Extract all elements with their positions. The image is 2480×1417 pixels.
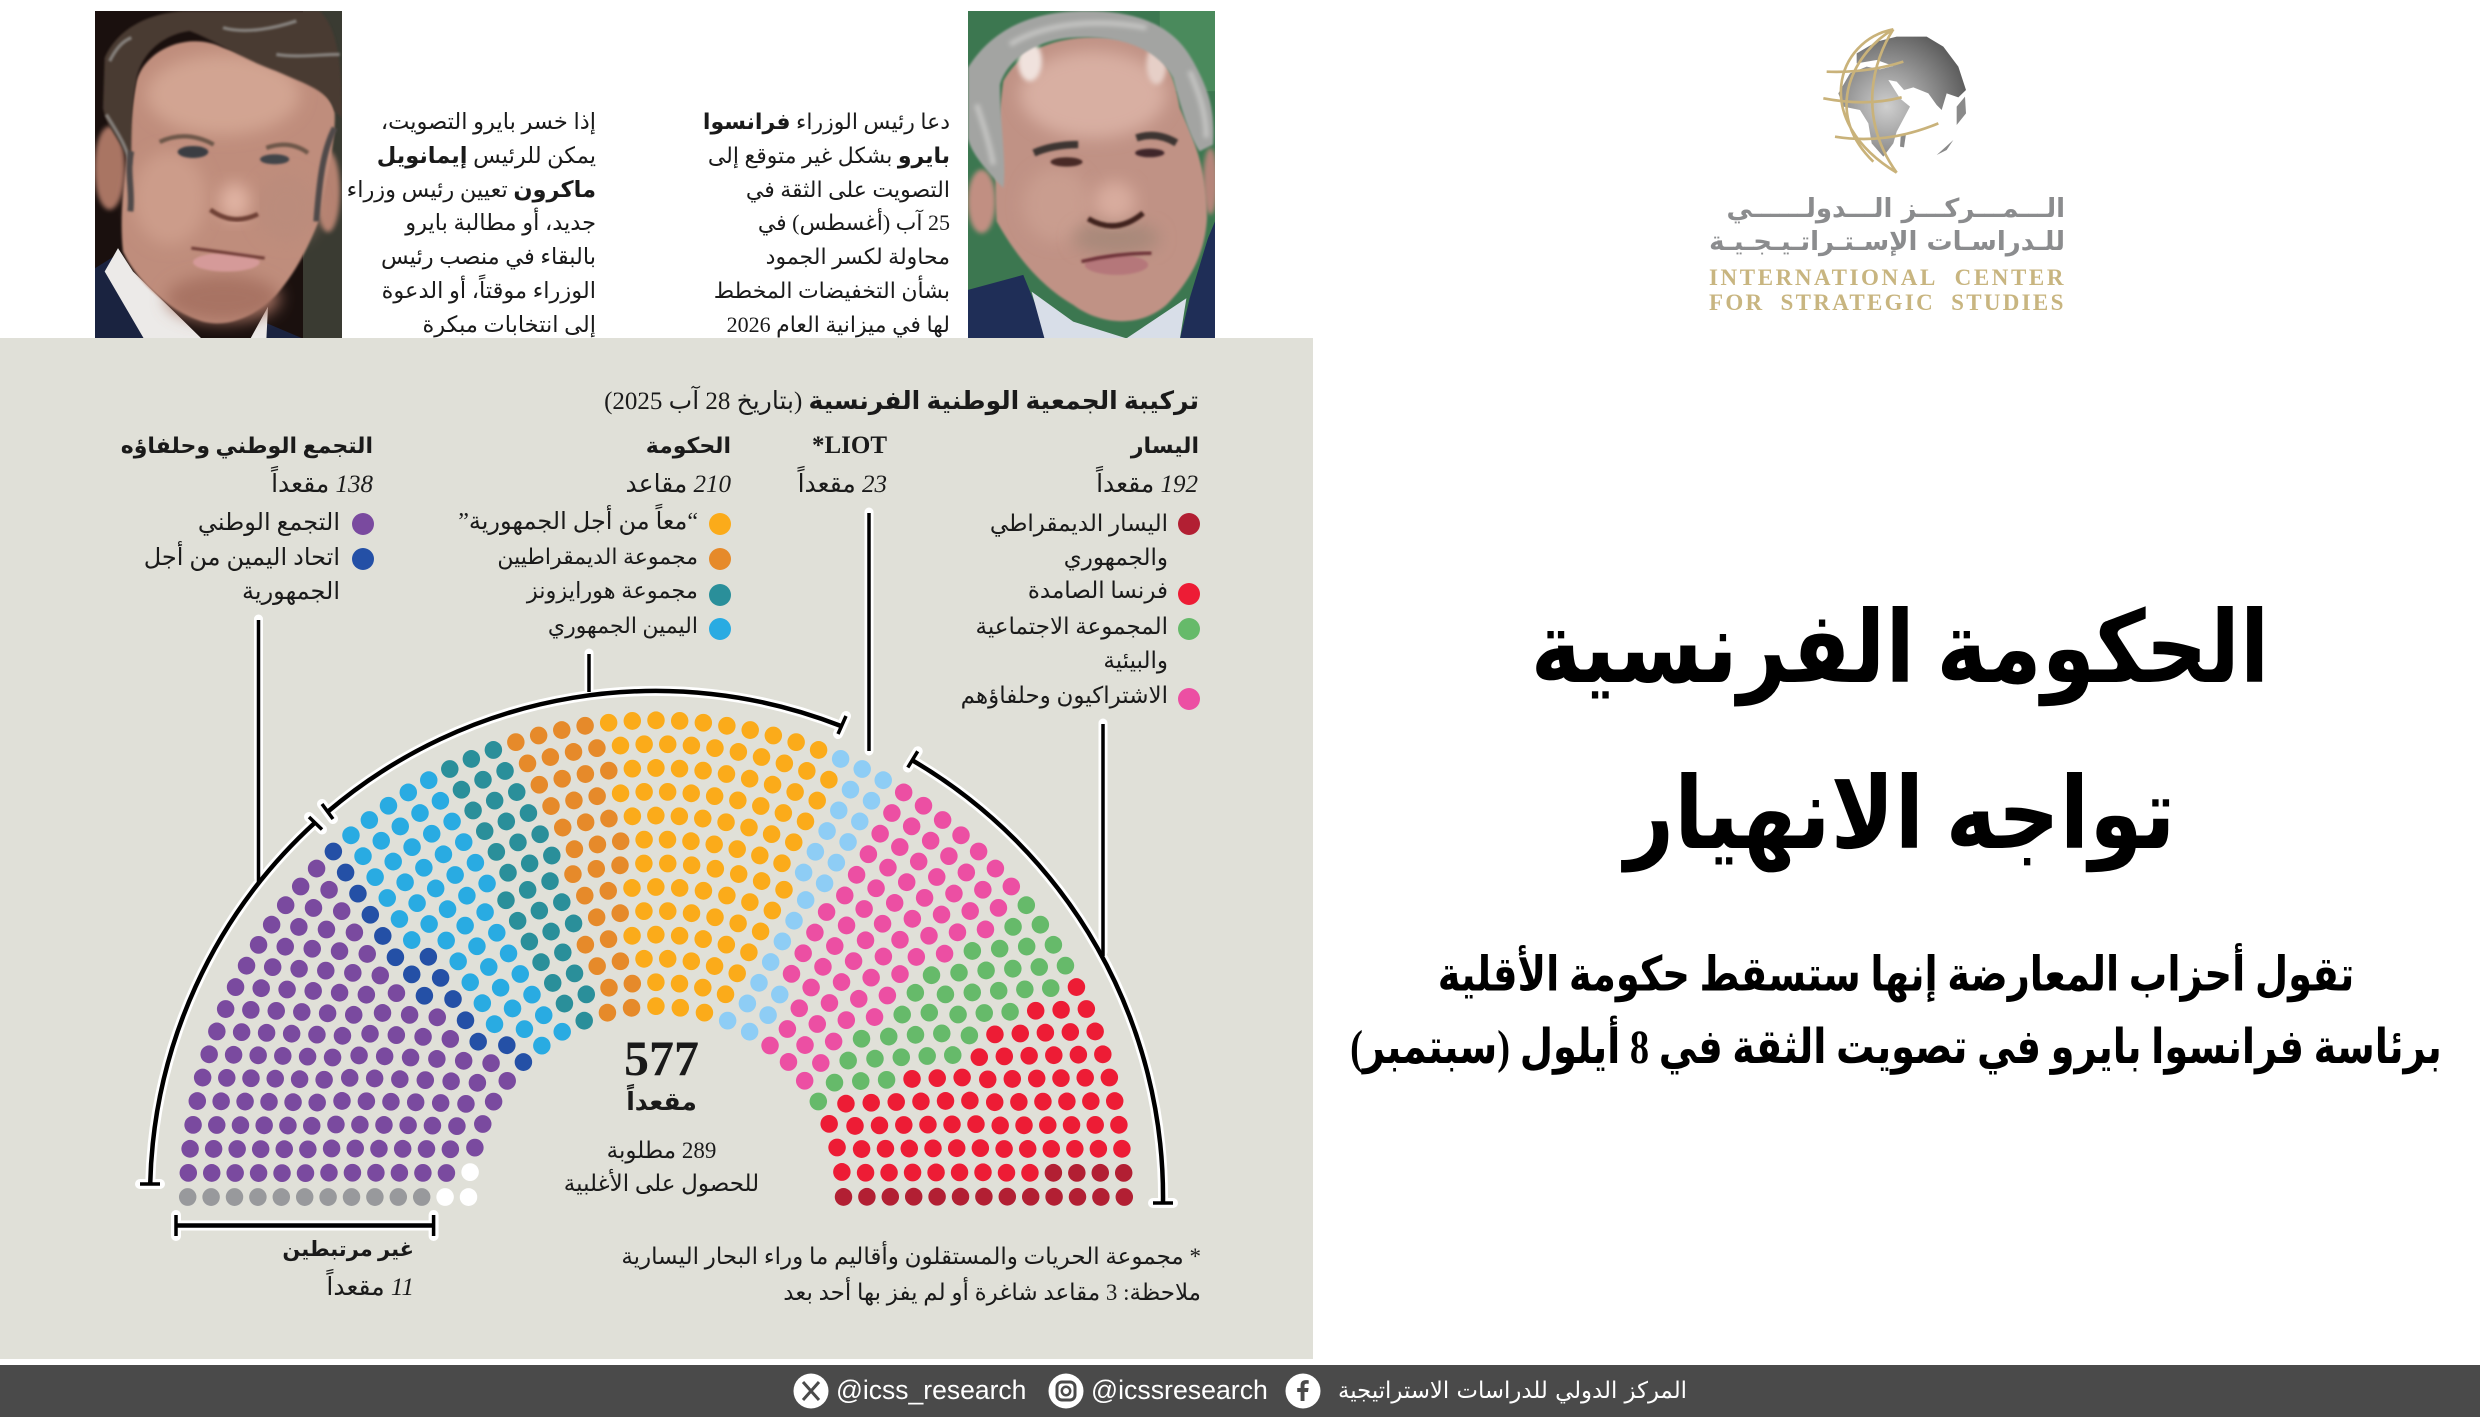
seat count: 192 مقعداً xyxy=(1096,471,1198,498)
text block: Bayrou: دعا رئيس الوزراء فرانسوا xyxy=(703,109,950,134)
legend label: مجموعة هورايزونز xyxy=(527,578,698,603)
seat count: 138 مقعداً xyxy=(271,471,373,498)
legend label xyxy=(976,614,1168,674)
legend label xyxy=(144,541,340,605)
column: LIOT xyxy=(797,432,887,498)
legend dot: Democratic and Republican Left xyxy=(1178,513,1200,535)
legend dot: Horizons group xyxy=(709,584,731,606)
logo English name xyxy=(1709,265,2066,314)
hemicycle chart xyxy=(135,508,1178,1241)
legend label: اتحاد اليمين من أجل xyxy=(144,545,340,571)
footnote: ملاحظة: 3 مقاعد شاغرة أو لم يفز بها أحد بعد xyxy=(783,1280,1201,1305)
main title: الحكومة الفرنسية xyxy=(1531,592,2269,704)
legend dot: National Rally xyxy=(352,513,374,535)
icon: X xyxy=(794,1374,828,1408)
footnote xyxy=(621,1241,1201,1306)
icon: Facebook xyxy=(1286,1374,1320,1408)
text block: Macron: يمكن للرئيس إيمانويل xyxy=(377,143,596,168)
main title xyxy=(1531,592,2269,872)
logo English name: FOR STRATEGIC STUDIES xyxy=(1709,290,2066,314)
subtitle: تقول أحزاب المعارضة إنها ستسقط حكومة الأقلية xyxy=(1438,949,2354,1001)
footnote: * مجموعة الحريات والمستقلون وأقاليم ما وراء البحار اليسارية xyxy=(621,1244,1201,1269)
non-attached heading: غير مرتبطين xyxy=(282,1237,414,1261)
logo Arabic name: الـــمـــركـــز الـــدولــــــي xyxy=(1726,194,2065,224)
non-attached label xyxy=(282,1237,414,1301)
panel: National Assembly composition xyxy=(0,338,1313,1359)
legend dot: France Unbowed xyxy=(1178,583,1200,605)
legend label: مجموعة الديمقراطيين xyxy=(497,544,698,569)
centre label: 577 seats xyxy=(564,1030,759,1197)
hemicycle seat dots xyxy=(188,720,1124,1222)
text block: Macron: ماكرون تعيين رئيس وزراء xyxy=(347,177,596,202)
legend label: فرنسا الصامدة xyxy=(1028,578,1168,603)
footer bar xyxy=(0,1365,2480,1417)
legend label: والجمهوري xyxy=(1064,545,1168,570)
non-attached seat count: 11 مقعداً xyxy=(326,1274,414,1301)
text block: Bayrou xyxy=(703,109,950,338)
majority note: للحصول على الأغلبية xyxy=(564,1171,759,1196)
column heading: LIOT* xyxy=(812,432,887,459)
column: National Rally and allies xyxy=(121,433,374,605)
Instagram handle: @icssresearch xyxy=(1091,1375,1268,1405)
legend label: الاشتراكيون وحلفاؤهم xyxy=(961,683,1168,708)
seat count: 23 مقعداً xyxy=(798,471,887,498)
legend label xyxy=(990,511,1168,571)
seats word: مقعداً xyxy=(626,1089,697,1116)
column heading: الحكومة xyxy=(646,433,731,458)
legend dot: Socialists and allies xyxy=(1178,688,1200,710)
legend label: “معاً من أجل الجمهورية” xyxy=(458,509,698,535)
icon: Instagram xyxy=(1048,1374,1084,1408)
text block: Bayrou: بشأن التخفيضات المخطط xyxy=(714,278,950,303)
photo: Emmanuel Macron xyxy=(95,11,342,338)
legend dot: Republican Right xyxy=(709,618,731,640)
main title: تواجه الانهيار xyxy=(1625,758,2175,870)
logo: International Center for Strategic Studies xyxy=(1709,28,2066,314)
legend label: التجمع الوطني xyxy=(198,510,340,536)
majority note xyxy=(564,1138,759,1197)
column heading: التجمع الوطني وحلفاؤه xyxy=(121,433,373,458)
footer organisation name: المركز الدولي للدراسات الاستراتيجية xyxy=(1338,1378,1687,1404)
panel heading: تركيبة الجمعية الوطنية الفرنسية (بتاريخ 28 آب 2025) xyxy=(604,388,1199,415)
bracket arcs and leader lines xyxy=(140,512,1173,1236)
text block: Macron xyxy=(347,109,596,338)
text block: Bayrou: التصويت على الثقة في xyxy=(746,177,950,202)
X handle: @icss_research xyxy=(836,1375,1026,1405)
logo Arabic name: للـدراسـات الإسـتـراتـيـجـيـة xyxy=(1709,227,2065,257)
text block: Bayrou: 25 آب (أغسطس) في xyxy=(758,210,950,235)
column: Left bloc xyxy=(961,433,1200,710)
legend dot: Democrats group xyxy=(709,548,731,570)
legend label: اليسار الديمقراطي xyxy=(990,511,1168,536)
logo English name: INTERNATIONAL CENTER xyxy=(1709,265,2066,290)
text block: Macron: الوزراء موقتاً، أو الدعوة xyxy=(382,278,596,303)
icon: globe xyxy=(1823,28,1966,174)
total seats number: 577 xyxy=(624,1030,699,1086)
legend label: الجمهورية xyxy=(242,579,340,605)
text block: Bayrou: بايرو بشكل غير متوقع إلى xyxy=(708,143,950,168)
legend dot: Together for the Republic xyxy=(709,513,731,535)
column: Government xyxy=(458,433,731,640)
text block: Macron: إلى انتخابات مبكرة xyxy=(422,312,596,337)
text block: Macron: إذا خسر بايرو التصويت، xyxy=(381,109,596,134)
seat count: 210 مقاعد xyxy=(626,471,731,498)
subtitle xyxy=(1350,943,2442,1075)
column heading: اليسار xyxy=(1131,433,1199,458)
logo Arabic name xyxy=(1709,194,2065,257)
legend dot: Union of the Right for the Republic xyxy=(352,548,374,570)
text block: Bayrou: لها في ميزانية العام 2026 xyxy=(727,312,950,337)
legend label: المجموعة الاجتماعية xyxy=(976,614,1168,639)
photo: François Bayrou xyxy=(968,11,1215,338)
subtitle: برئاسة فرانسوا بايرو في تصويت الثقة في 8 أيلول (سبتمبر) xyxy=(1350,1022,2442,1075)
legend label: اليمين الجمهوري xyxy=(548,613,698,638)
legend dot: Social and Ecologist group xyxy=(1178,618,1200,640)
text block: Macron: بالبقاء في منصب رئيس xyxy=(381,244,596,269)
majority note: 289 مطلوبة xyxy=(607,1138,716,1163)
legend label: والبيئية xyxy=(1103,648,1168,673)
text block: Bayrou: محاولة لكسر الجمود xyxy=(766,244,950,269)
text block: Macron: جديد، أو مطالبة بايرو xyxy=(405,210,596,235)
